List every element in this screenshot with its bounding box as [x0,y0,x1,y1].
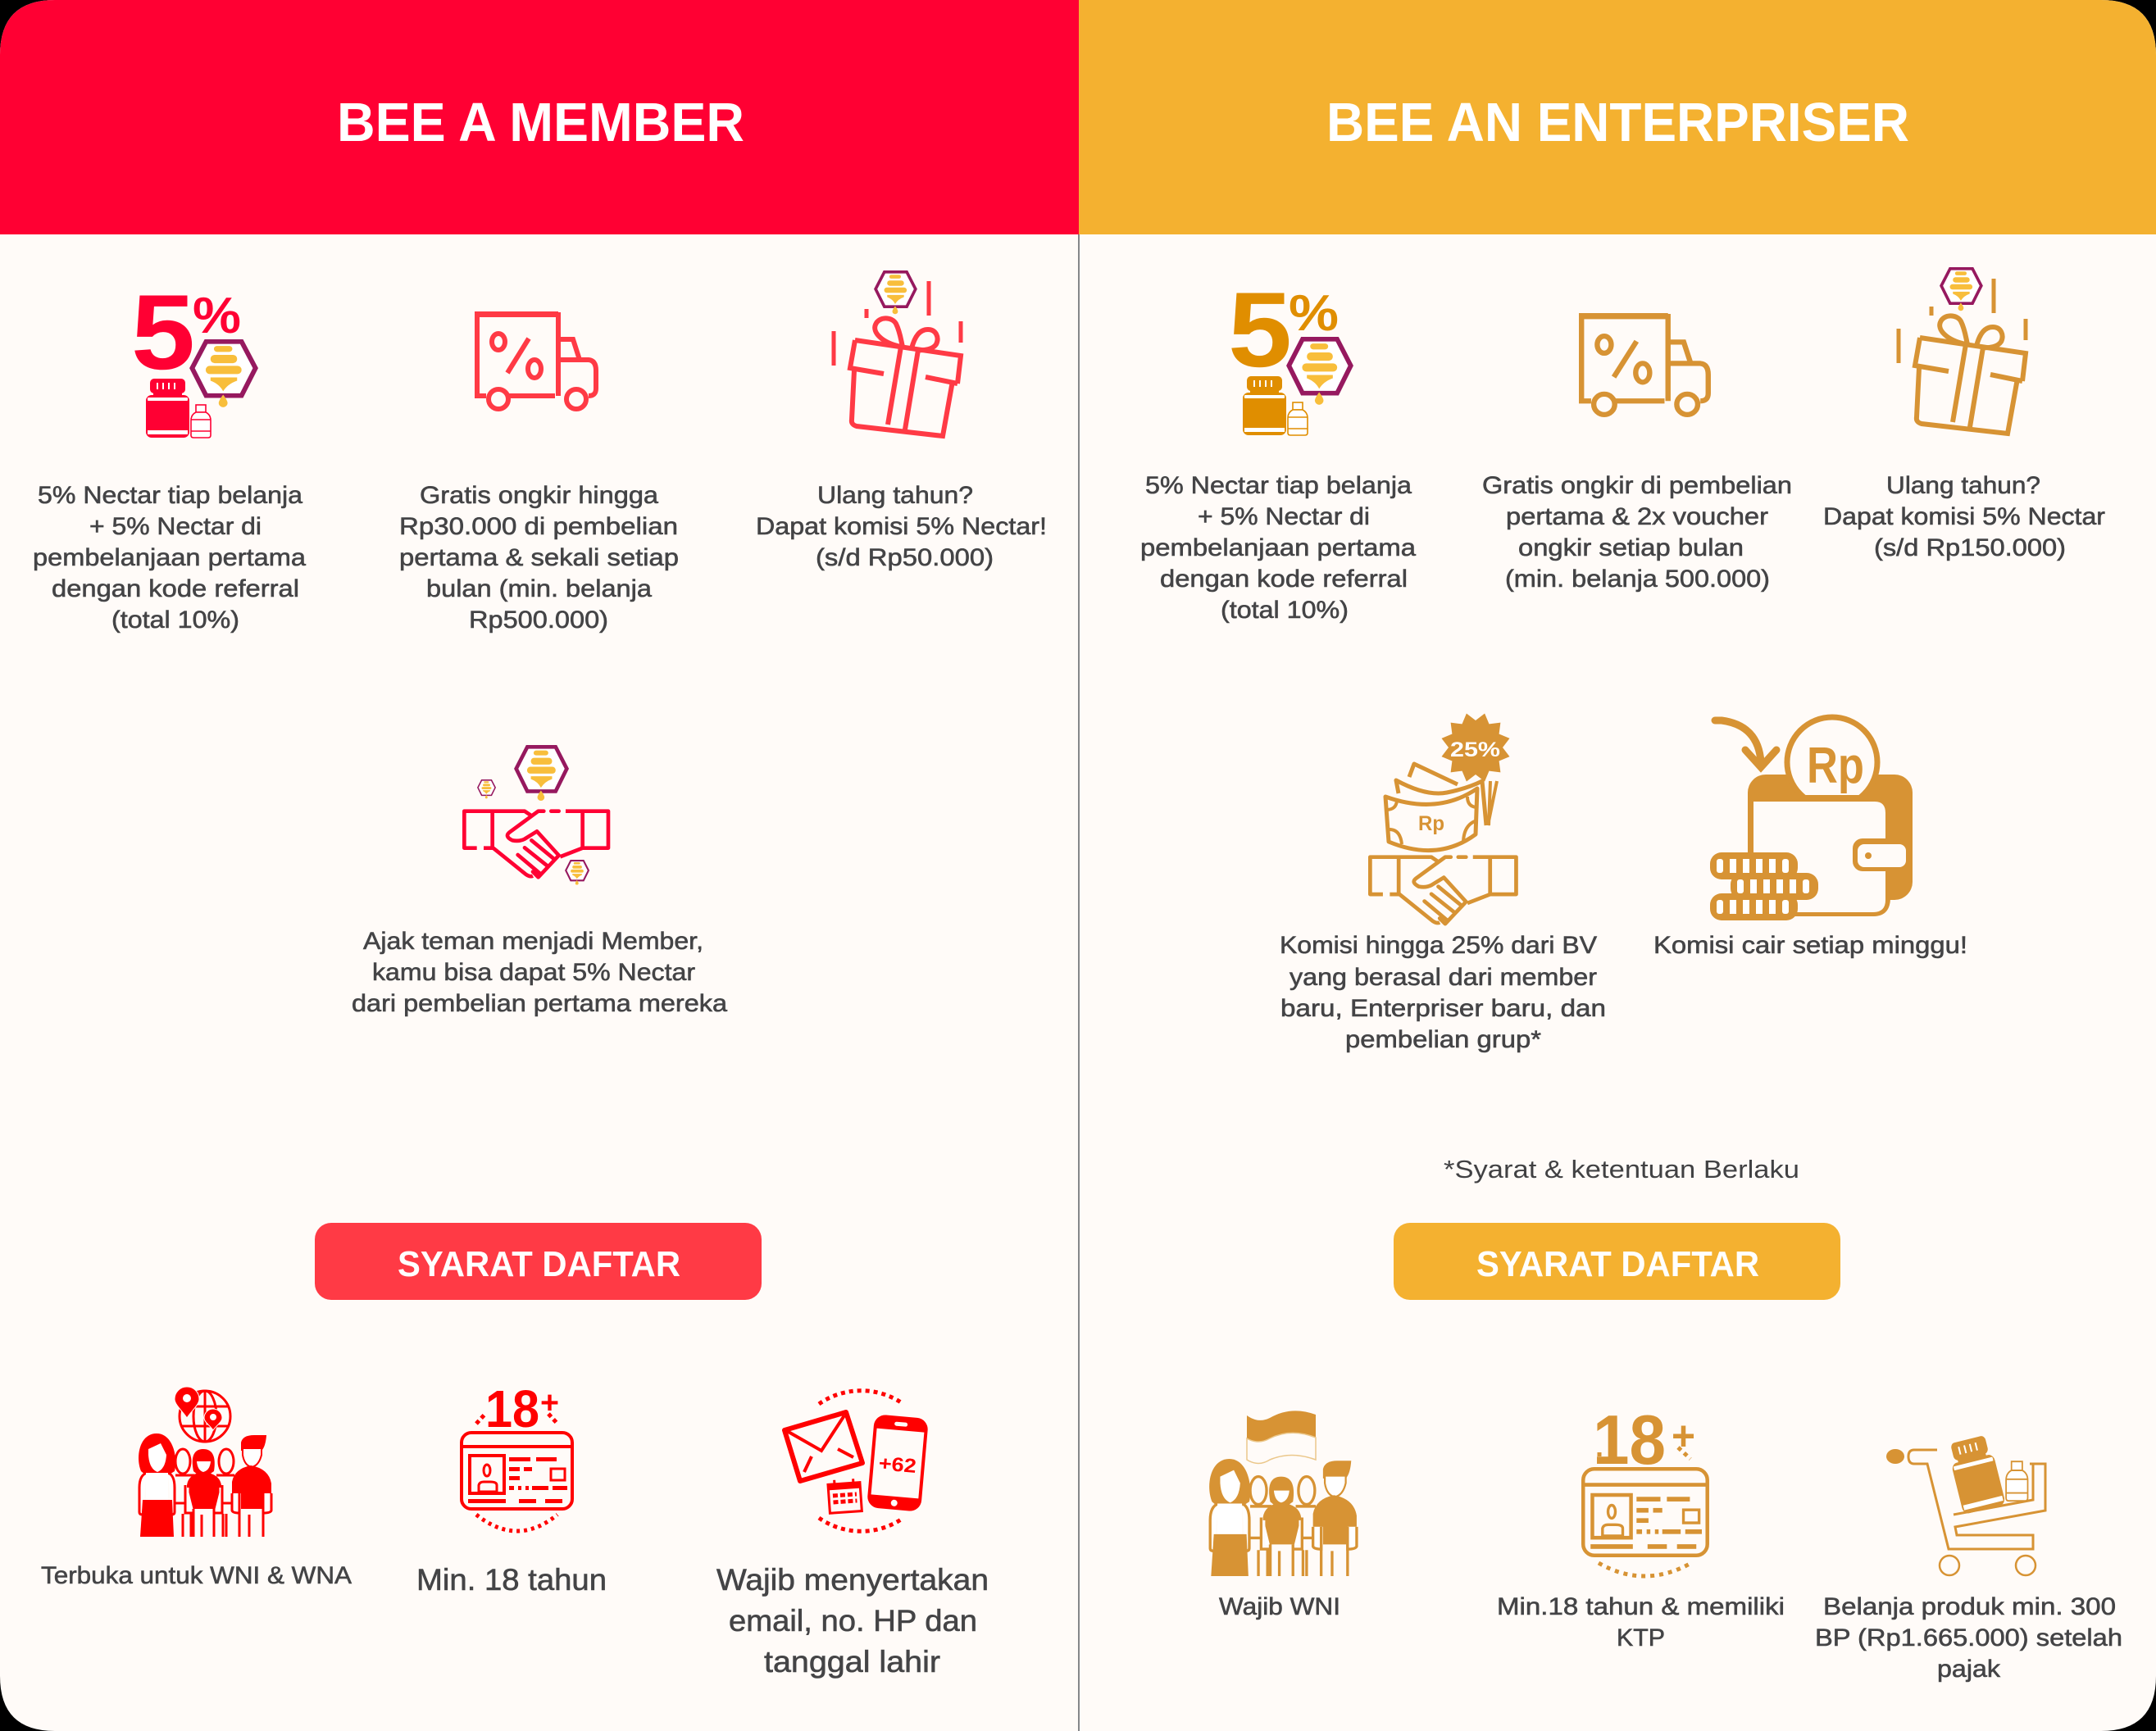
icon: people with globe and pins [139,1387,271,1537]
panel: BEE A MEMBER [0,0,1079,1731]
button: syarat daftar member: SYARAT DAFTAR [398,1244,680,1284]
text: 5% Nectar description: 5% Nectar tiap belanja [38,482,302,509]
text: 5% Nectar description: 5% Nectar tiap belanja [1145,472,1412,499]
text: minimum purchase: pajak [1937,1656,2001,1683]
requirement: WNI only [1209,1411,1357,1620]
icon: 5 percent nectar [1228,270,1351,435]
benefit: weekly payout [1653,717,1967,959]
panel: BEE AN ENTERPRISER [1079,0,2156,1731]
text: 5% Nectar description: pembelanjaan pertama [1140,534,1416,561]
text: email, phone, birth date [716,1563,989,1679]
text: 25% commission description [1280,932,1606,1053]
text: email, phone, birth date: tanggal lahir [764,1645,940,1679]
text: 25% commission description: pembelian grup* [1345,1026,1541,1053]
benefit: 5% Nectar [1140,270,1416,624]
requirement: open to WNI and WNA [41,1387,352,1589]
icon: 5 percent nectar: % [1289,285,1339,342]
text: birthday description: Ulang tahun? [817,482,973,509]
benefit: birthday [1823,269,2105,561]
text: 5% Nectar description: (total 10%) [1221,597,1349,624]
text: WNI only: Wajib WNI [1219,1593,1340,1620]
text: birthday description [756,482,1047,571]
icon: shopping cart with bottles [1886,1434,2045,1575]
text: invite friends description [352,928,727,1017]
text: free shipping description: pertama & sekali setiap [399,544,679,571]
text: invite friends description: Ajak teman menjadi Member, [363,928,703,955]
benefit: invite friends [352,747,727,1017]
icon: 5 percent nectar: 5 [1228,270,1292,389]
header band: enterpriser [1079,0,2156,234]
icon: envelope, phone and calendar [785,1391,929,1531]
text: minimum 18 years: Min. 18 tahun [416,1563,607,1597]
icon: people with flag [1209,1411,1357,1576]
text: 25% commission description: baru, Enterpriser baru, dan [1280,995,1606,1022]
header band: member [0,0,1079,234]
text: free shipping description: Gratis ongkir hingga [420,482,658,509]
icon: money, badge and handshake: 25% [1450,738,1500,761]
text: 5% Nectar description: dengan kode referral [52,575,299,602]
divider line [1078,234,1080,1731]
icon: delivery truck [1579,313,1708,415]
icon: 5 percent nectar: % [193,288,241,344]
icon: 18+ ID card: 18 [485,1379,539,1438]
benefit: free shipping [399,311,679,634]
text: 5% Nectar description [1140,472,1416,624]
benefit: 5% Nectar [33,272,306,634]
icon: 18+ ID card: + [1672,1413,1695,1459]
text: minimum purchase: BP (Rp1.665.000) setelah [1815,1624,2122,1651]
text: 5% Nectar description: + 5% Nectar di [1198,503,1370,530]
button: syarat daftar enterpriser [1394,1223,1840,1300]
text: invite friends description: dari pembelian pertama mereka [352,990,727,1017]
text: 18 years and KTP [1497,1593,1785,1651]
text: birthday description [1823,472,2105,561]
text: 18 years and KTP: Min.18 tahun & memiliki [1497,1593,1785,1620]
text: weekly payout: Komisi cair setiap minggu! [1653,932,1967,959]
text: birthday description: Dapat komisi 5% Nectar [1823,503,2105,530]
requirement: minimum purchase [1815,1434,2122,1683]
text: 5% Nectar description: + 5% Nectar di [89,513,262,540]
icon: wallet with coins [1710,717,1913,920]
text: free shipping description: Rp500.000) [469,607,608,634]
text: 5% Nectar description: (total 10%) [111,607,239,634]
text: minimum purchase [1815,1593,2122,1683]
text: 25% commission description: yang berasal dari member [1290,964,1597,991]
text: birthday description: (s/d Rp50.000) [816,544,994,571]
text: email, phone, birth date: email, no. HP dan [729,1604,977,1638]
text: free shipping description: Rp30.000 di pembelian [399,513,678,540]
button: syarat daftar member [315,1223,762,1300]
requirement: 18 years and KTP [1497,1402,1785,1651]
text: birthday description: (s/d Rp150.000) [1874,534,2066,561]
button: syarat daftar enterpriser: SYARAT DAFTAR [1476,1244,1759,1284]
text: free shipping description [1482,472,1792,593]
text: 5% Nectar description [33,482,306,634]
requirement: email, phone, birth date [716,1391,989,1679]
text: 5% Nectar description: dengan kode referral [1160,566,1408,593]
icon: money, badge and handshake [1370,713,1516,924]
text: invite friends description: kamu bisa dapat 5% Nectar [372,959,695,986]
requirement: minimum 18 years [416,1379,607,1597]
icon: money, badge and handshake: Rp [1418,812,1444,835]
heading: BEE A MEMBER: BEE A MEMBER [337,92,744,153]
icon: handshake with honey hexagons [464,747,608,885]
footnote: terms apply: *Syarat & ketentuan Berlaku [1444,1155,1799,1184]
icon: 5 percent nectar [131,272,256,438]
icon: delivery truck [475,311,596,409]
text: email, phone, birth date: Wajib menyertakan [716,1563,989,1597]
text: open to WNI and WNA: Terbuka untuk WNI & WNA [41,1562,352,1589]
icon: wallet with coins: Rp [1807,738,1864,794]
benefit: birthday [756,272,1047,571]
icon: gift box [834,272,961,436]
text: birthday description: Ulang tahun? [1886,472,2040,499]
text: free shipping description: bulan (min. belanja [426,575,652,602]
heading: BEE AN ENTERPRISER: BEE AN ENTERPRISER [1326,92,1909,153]
text: 5% Nectar description: pembelanjaan pertama [33,544,306,571]
text: free shipping description: pertama & 2x voucher [1506,503,1768,530]
icon: 5 percent nectar: 5 [131,272,195,392]
text: free shipping description [399,482,679,634]
icon: gift box [1899,269,2026,434]
icon: envelope, phone and calendar: +62 [878,1452,917,1478]
benefit: free shipping [1482,313,1792,593]
icon: 18+ ID card [462,1379,572,1531]
text: free shipping description: Gratis ongkir di pembelian [1482,472,1792,499]
icon: 18+ ID card [1583,1402,1708,1576]
benefit: 25% commission [1280,713,1606,1053]
icon: 18+ ID card: 18 [1593,1402,1666,1479]
icon: 18+ ID card: + [540,1386,559,1420]
text: minimum purchase: Belanja produk min. 300 [1823,1593,2116,1620]
text: 25% commission description: Komisi hingga 25% dari BV [1280,932,1597,959]
text: free shipping description: (min. belanja 500.000) [1505,566,1770,593]
text: free shipping description: ongkir setiap bulan [1518,534,1744,561]
text: birthday description: Dapat komisi 5% Nectar! [756,513,1047,540]
text: 18 years and KTP: KTP [1617,1624,1665,1651]
